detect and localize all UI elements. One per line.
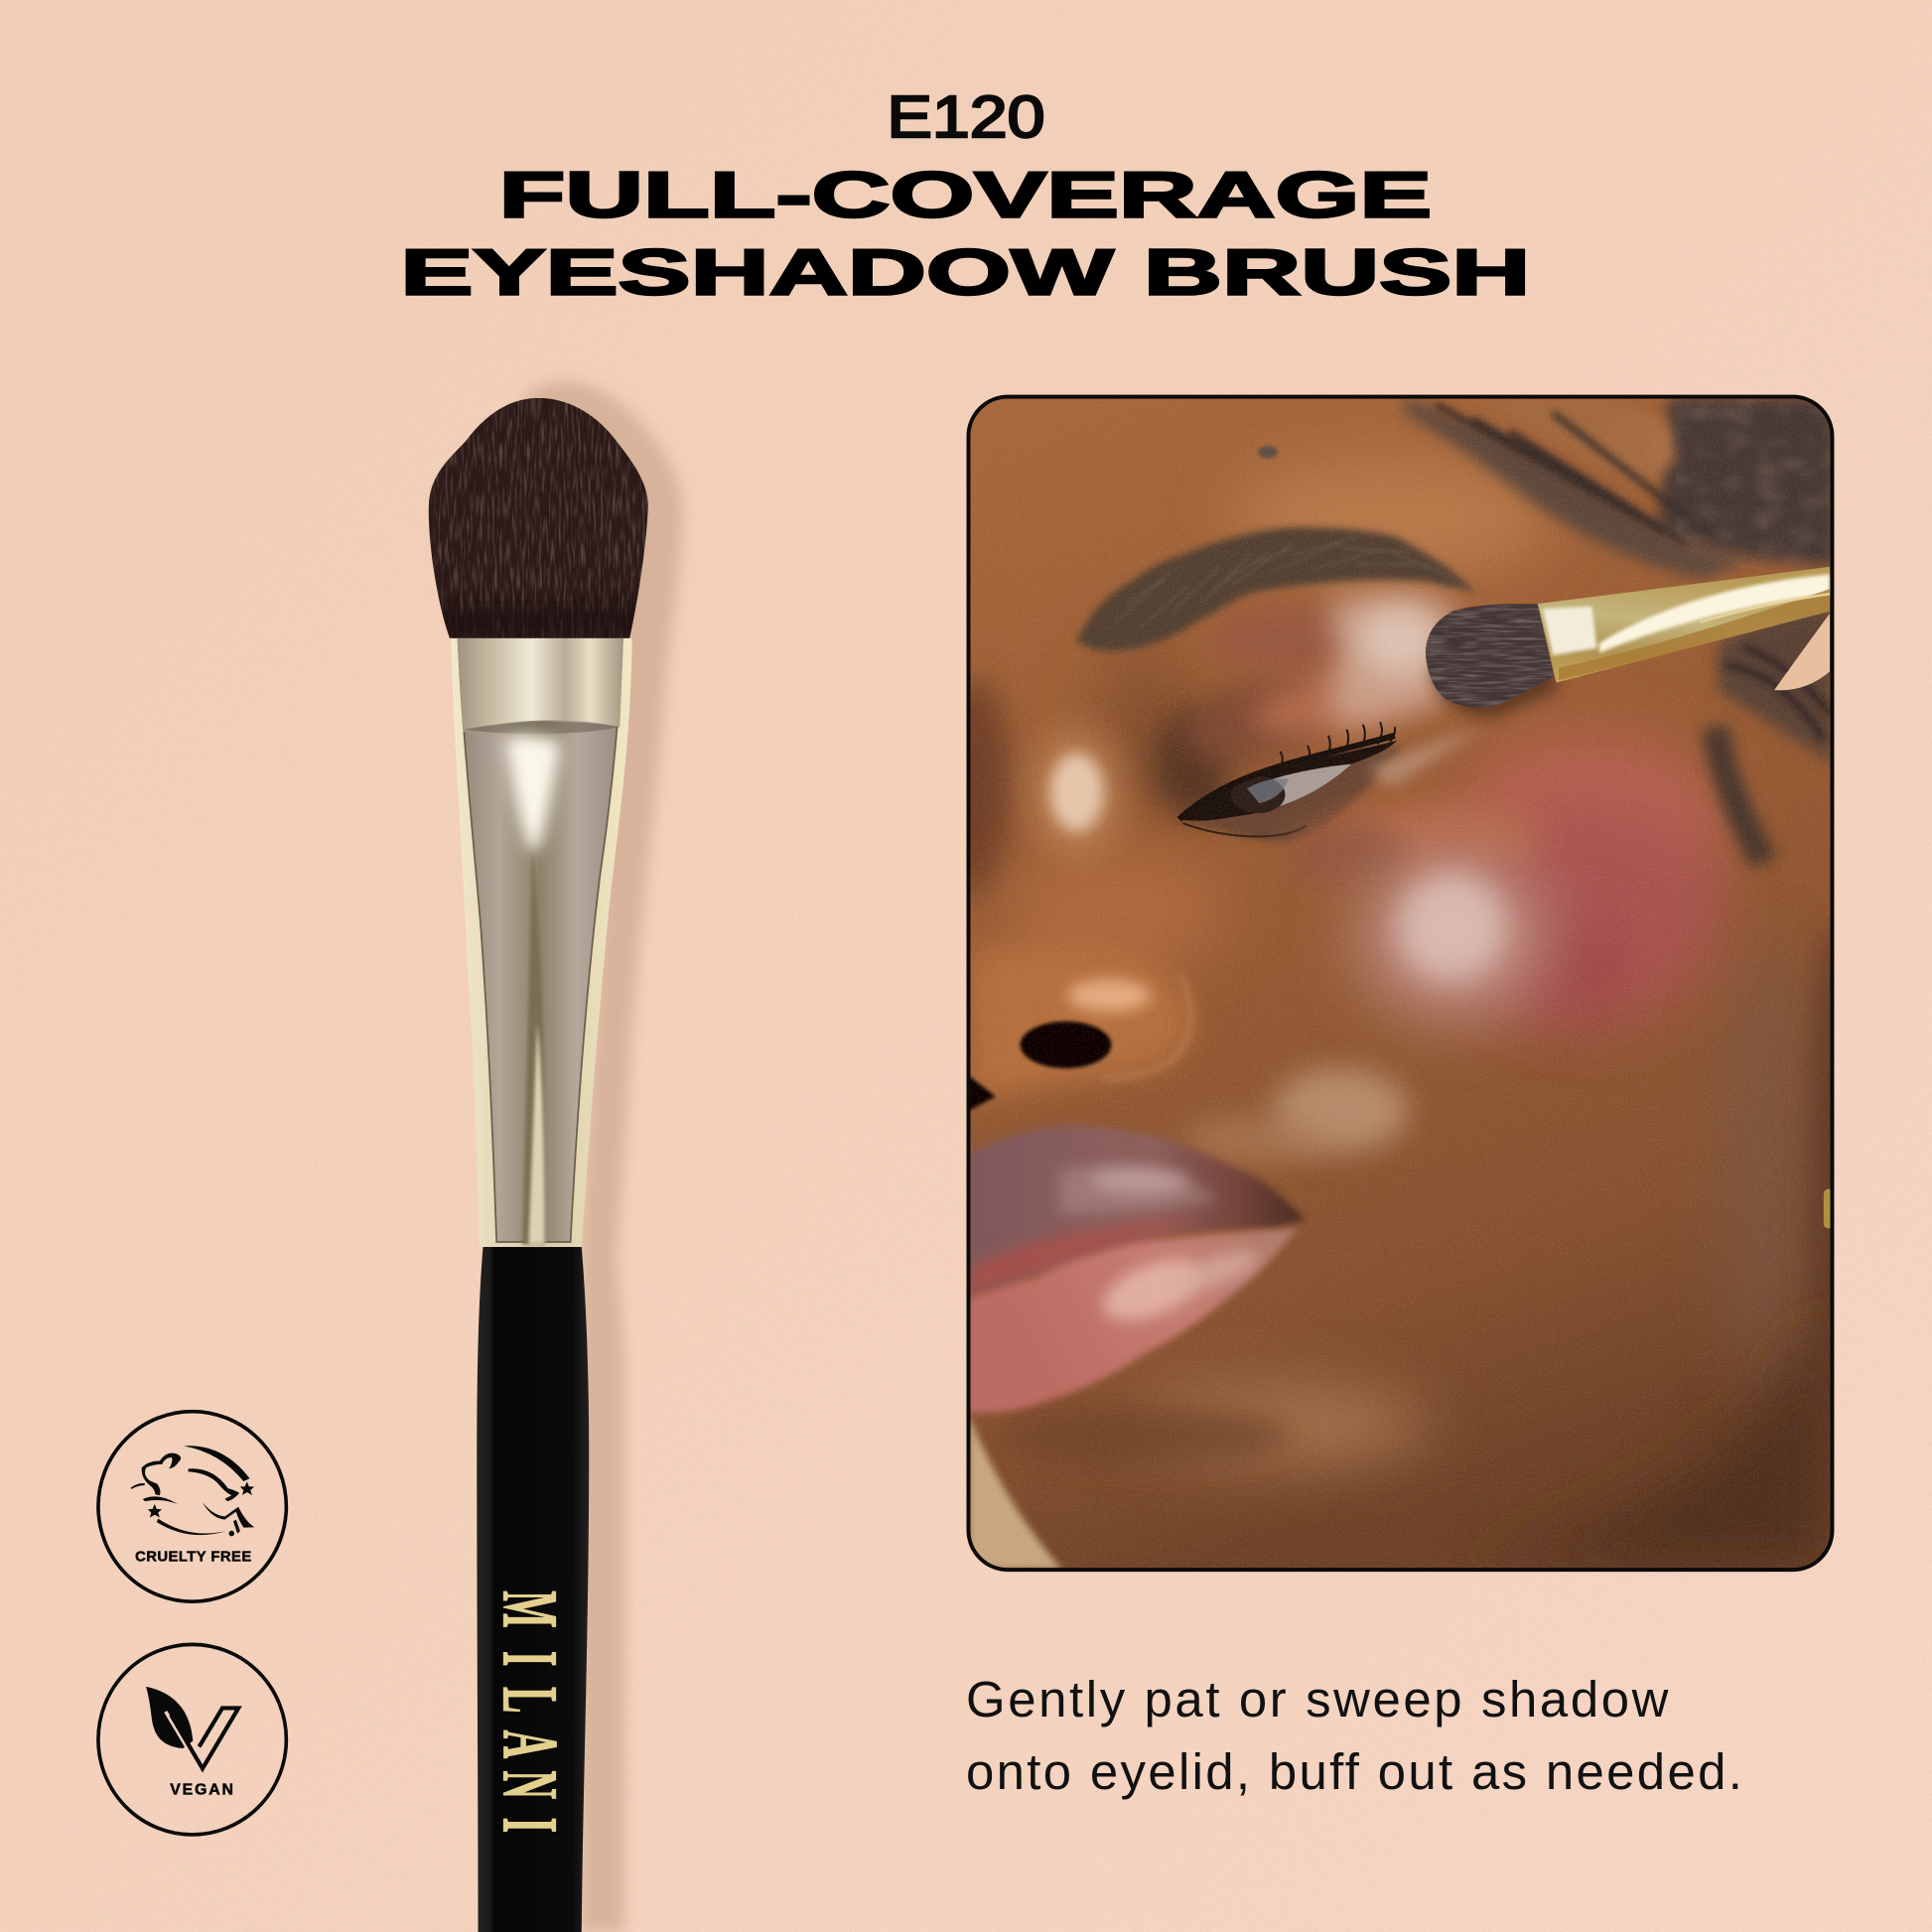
application brush [1417,567,1830,718]
badge: cruelty free [98,1412,286,1601]
instruction text [966,1671,1742,1800]
eye [1179,722,1397,837]
cheek highlight [1355,850,1553,1023]
metal ferrule [451,638,632,1247]
hair [1405,397,1836,863]
brush handle [477,1247,589,1932]
brush shadow on lid [1430,617,1559,718]
title block [400,83,1530,309]
photo: brush applied to model's eyelid [941,397,1855,1570]
nose [968,942,1192,1103]
eyelid highlight [1330,595,1453,727]
label: CRUELTY FREE [135,1549,251,1565]
eyebrow [1077,527,1476,651]
skin base [968,397,1832,1570]
bristle tip [1417,598,1565,715]
heading line one: FULL-COVERAGE [499,159,1432,230]
upper lip [967,1126,1305,1297]
skin texture [968,397,1832,1570]
lower lid [1179,746,1405,842]
photo border [968,397,1832,1570]
instruction text: Gently pat or sweep shadow [966,1671,1669,1727]
nose bridge shine [1028,725,1126,860]
eye socket [1154,709,1232,819]
instruction text: onto eyelid, buff out as needed. [966,1743,1742,1800]
earring [1824,1189,1834,1228]
blush [1453,733,1725,905]
nostrils [1021,1022,1111,1068]
product code: E120 [888,83,1044,150]
lower cheek shine [1273,1068,1409,1152]
heading line two: EYESHADOW BRUSH [400,237,1530,309]
backdrop corner [968,1415,1062,1570]
badge: vegan [98,1644,286,1835]
label: VEGAN [170,1781,233,1799]
forehead mole [1258,446,1278,459]
bristles [429,397,648,638]
icon: leaping rabbit [131,1446,254,1536]
brush shadow [523,381,683,1932]
gold ferrule [1538,567,1830,683]
handle logo: MILANI [486,1590,574,1833]
nose shadow [971,670,1023,905]
product brush [419,392,659,1932]
icon: leaf and V [146,1687,238,1768]
lower lip [967,1228,1298,1413]
nail [1774,614,1830,690]
